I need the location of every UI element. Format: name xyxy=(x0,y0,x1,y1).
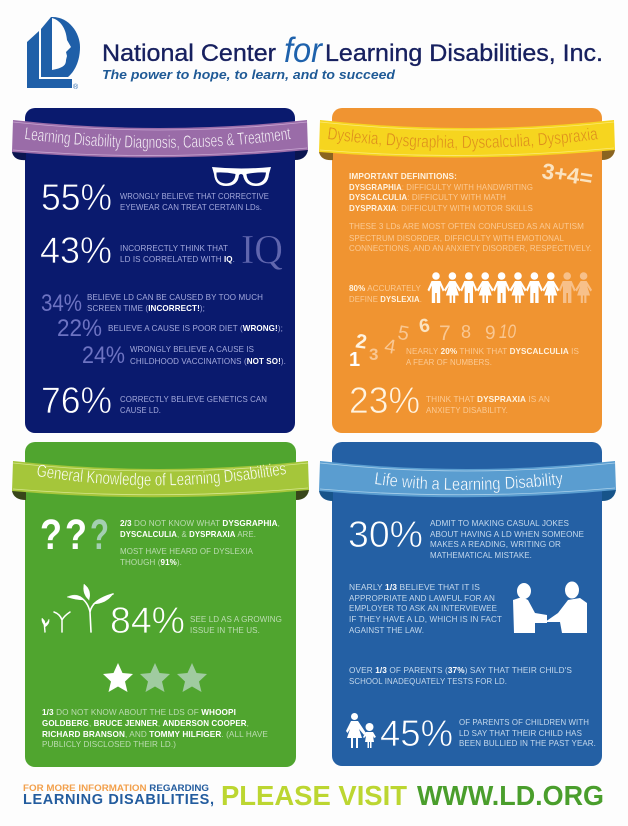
icon: numbers 1 to 10 xyxy=(349,315,516,371)
stat: 55%: 55% xyxy=(41,176,112,218)
organisation name: Learning Disabilities, Inc. xyxy=(325,40,603,67)
text: 2/3 do not know: 2/3 DO NOT KNOW WHAT DYSGRAPHIA, xyxy=(120,518,280,528)
text: school tests xyxy=(349,665,572,686)
stat: 80% define dyslexia: DEFINE DYSLEXIA. xyxy=(349,294,422,304)
stat: 23%: THINK THAT DYSPRAXIA IS AN xyxy=(426,394,550,404)
banner: dyslexia heading xyxy=(319,120,615,160)
text: 2/3 do not know: MOST HAVE HEARD OF DYSLEXIA xyxy=(120,546,253,556)
stat: 34%: 34% xyxy=(41,290,82,317)
stat: 55%: WRONGLY BELIEVE THAT CORRECTIVE xyxy=(120,191,269,201)
text: dyscalculia: A FEAR OF NUMBERS. xyxy=(406,357,492,367)
stat: 22%: BELIEVE A CAUSE IS POOR DIET (WRONG!); xyxy=(108,323,283,333)
stat: 30%: MAKES A READING, WRITING OR xyxy=(430,539,561,549)
icon: question marks: ? xyxy=(90,511,109,559)
stat: 43% xyxy=(40,229,235,271)
text: 2/3 do not know: THOUGH (91%). xyxy=(120,557,182,567)
icon: numbers 1 to 10: 5 xyxy=(396,322,411,346)
icon: row of ten people xyxy=(428,272,592,303)
stat: 30%: 30% xyxy=(348,513,423,555)
footer: website: WWW.LD.ORG xyxy=(417,780,604,811)
banner: general knowledge heading xyxy=(12,461,309,500)
stat: 23%: ANXIETY DISABILITY. xyxy=(426,405,508,415)
icon: growing plants xyxy=(42,584,113,632)
stat: 76%: CORRECTLY BELIEVE GENETICS CAN xyxy=(120,394,267,404)
stat: 84%: ISSUE IN THE US. xyxy=(190,625,260,635)
text: 2/3 do not know xyxy=(120,518,280,567)
footer: call to action xyxy=(23,780,604,811)
icon: LD logo xyxy=(27,17,80,91)
stat: 23%: 23% xyxy=(349,379,420,421)
stat: 43%: 43% xyxy=(40,229,112,271)
stat: 45%: 45% xyxy=(380,712,453,754)
icon: handshake xyxy=(513,582,587,633)
banner: life with LD heading xyxy=(319,461,616,501)
icon: numbers 1 to 10: 8 xyxy=(461,322,471,342)
icon: numbers 1 to 10: 3 xyxy=(369,345,378,364)
icon: glasses xyxy=(212,167,271,186)
panel: diagnosis, causes and treatment xyxy=(12,108,308,433)
organisation name: for xyxy=(284,31,323,70)
stat: 30%: ABOUT HAVING A LD WHEN SOMEONE xyxy=(430,529,584,539)
text: confused LDs xyxy=(349,221,592,253)
stat: 30%: ADMIT TO MAKING CASUAL JOKES xyxy=(430,518,569,528)
stat: 84%: 84% xyxy=(110,599,185,641)
stat: 43%: INCORRECTLY THINK THAT xyxy=(120,243,228,253)
organisation name xyxy=(102,31,603,70)
stat: 23% xyxy=(349,379,550,421)
stat: 24%: 24% xyxy=(82,342,125,369)
text: 1/3 celebrities: RICHARD BRANSON, AND TOMMY HILFIGER. (ALL HAVE xyxy=(42,729,268,739)
stat: 24%: CHILDHOOD VACCINATIONS (NOT SO!). xyxy=(130,356,286,366)
icon: question marks: ? xyxy=(40,511,62,559)
banner: dyslexia heading: Dyslexia, Dysgraphia, Dyscalculia, Dyspraxia xyxy=(328,128,598,152)
definitions: DYSPRAXIA: DIFFICULTY WITH MOTOR SKILLS xyxy=(349,203,533,213)
stat: 30% xyxy=(348,513,584,560)
stat: 76%: 76% xyxy=(41,379,112,421)
icon: LD logo: ® xyxy=(73,83,79,91)
stat: 76%: CAUSE LD. xyxy=(120,405,161,415)
text: school tests: OVER 1/3 OF PARENTS (37%) SAY THAT THEIR CHILD'S xyxy=(349,665,572,675)
text: 1/3 celebrities: GOLDBERG, BRUCE JENNER, ANDERSON COOPER, xyxy=(42,718,249,728)
banner: diagnosis heading: Learning Disability Diagnosis, Causes & Treatment xyxy=(25,128,291,152)
text: employer question xyxy=(349,582,502,635)
icon: 3+4=: 3+4= xyxy=(540,158,595,191)
stat: 45%: OF PARENTS OF CHILDREN WITH xyxy=(459,717,589,727)
icon: question marks xyxy=(40,511,109,559)
panel: dyslexia, dysgraphia, dyscalculia, dyspraxia xyxy=(319,108,615,433)
stat: 80% define dyslexia: 80% ACCURATELY xyxy=(349,283,421,293)
definitions: DYSCALCULIA: DIFFICULTY WITH MATH xyxy=(349,192,506,202)
text: employer question: EMPLOYER TO ASK AN INTERVIEWEE xyxy=(349,603,497,613)
footer: please visit: PLEASE VISIT xyxy=(221,780,407,811)
text: 1/3 celebrities xyxy=(42,707,268,749)
stat: 55% xyxy=(41,176,269,218)
icon: numbers 1 to 10: 4 xyxy=(383,335,398,359)
stat: 80% define dyslexia xyxy=(349,283,422,304)
stat: 34%: BELIEVE LD CAN BE CAUSED BY TOO MUCH xyxy=(87,292,263,302)
text: dyscalculia: NEARLY 20% THINK THAT DYSCALCULIA IS xyxy=(406,346,579,356)
text: confused LDs: CONNECTIONS, AND AN ANXIETY DISORDER, RESPECTIVELY. xyxy=(349,243,592,253)
panel: life with a learning disability xyxy=(319,442,616,766)
stat: 34% xyxy=(41,290,263,317)
definitions xyxy=(349,171,533,213)
text: employer question: IF THEY HAVE A LD, WHICH IS IN FACT xyxy=(349,614,502,624)
text: 2/3 do not know: DYSCALCULIA, & DYSPRAXIA ARE. xyxy=(120,529,256,539)
stat: 22%: 22% xyxy=(57,315,102,342)
stat: 24%: WRONGLY BELIEVE A CAUSE IS xyxy=(130,344,254,354)
definitions: IMPORTANT DEFINITIONS: xyxy=(349,171,457,181)
banner: general knowledge heading: General Knowledge of Learning Disabilities xyxy=(37,464,286,489)
icon: numbers 1 to 10: 2 xyxy=(354,330,368,354)
stat: 84% xyxy=(110,599,282,641)
text: confused LDs: THESE 3 LDs ARE MOST OFTEN CONFUSED AS AN AUTISM xyxy=(349,221,584,231)
icon: question marks: ? xyxy=(65,511,87,559)
footer: learning disabilities: LEARNING DISABILITIES, xyxy=(23,792,214,808)
tagline: The power to hope, to learn, and to succeed xyxy=(102,67,396,82)
organisation name: National Center xyxy=(102,40,276,67)
icon: mother and child xyxy=(346,713,376,748)
header: logo and organisation name xyxy=(27,17,603,91)
text: dyscalculia xyxy=(406,346,579,367)
panel: general knowledge xyxy=(12,442,309,767)
stat: 30%: MATHEMATICAL MISTAKE. xyxy=(430,550,532,560)
icon: numbers 1 to 10: 6 xyxy=(418,315,432,338)
footer: for more information: FOR MORE INFORMATION REGARDING xyxy=(23,783,209,794)
stat: 45%: LD SAY THAT THEIR CHILD HAS xyxy=(459,728,582,738)
icon: numbers 1 to 10: 1 xyxy=(349,349,360,371)
stat: 24% xyxy=(82,342,286,369)
text: employer question: AGAINST THE LAW. xyxy=(349,625,424,635)
stat: 45% xyxy=(380,712,596,754)
icon: numbers 1 to 10: 7 xyxy=(439,322,451,345)
icon: numbers 1 to 10: 10 xyxy=(499,322,516,343)
banner: life with LD heading: Life with a Learning Disability xyxy=(375,472,562,493)
text: employer question: NEARLY 1/3 BELIEVE THAT IT IS xyxy=(349,582,480,592)
stat: 22% xyxy=(57,315,283,342)
stat: 84%: SEE LD AS A GROWING xyxy=(190,614,282,624)
stat: 55%: EYEWEAR CAN TREAT CERTAIN LDs. xyxy=(120,202,262,212)
text: school tests: SCHOOL INADEQUATELY TESTS FOR LD. xyxy=(349,676,507,686)
banner: diagnosis heading xyxy=(12,120,308,160)
text: 1/3 celebrities: 1/3 DO NOT KNOW ABOUT THE LDS OF WHOOPI xyxy=(42,707,236,717)
icon: numbers 1 to 10: 9 xyxy=(485,323,496,344)
icon: IQ: IQ xyxy=(241,226,283,272)
stat: 34%: SCREEN TIME (INCORRECT!); xyxy=(87,303,205,313)
stat: 76% xyxy=(41,379,267,421)
text: 1/3 celebrities: PUBLICLY DISCLOSED THEIR LD.) xyxy=(42,739,176,749)
definitions: DYSGRAPHIA: DIFFICULTY WITH HANDWRITING xyxy=(349,182,533,192)
text: employer question: APPROPRIATE AND LAWFUL FOR AN xyxy=(349,593,495,603)
stat: 43%: LD IS CORRELATED WITH IQ. xyxy=(120,254,235,264)
text: confused LDs: SPECTRUM DISORDER, DIFFICULTY WITH EMOTIONAL xyxy=(349,233,564,243)
icon: three stars xyxy=(103,663,207,692)
stat: 45%: BEEN BULLIED IN THE PAST YEAR. xyxy=(459,738,596,748)
